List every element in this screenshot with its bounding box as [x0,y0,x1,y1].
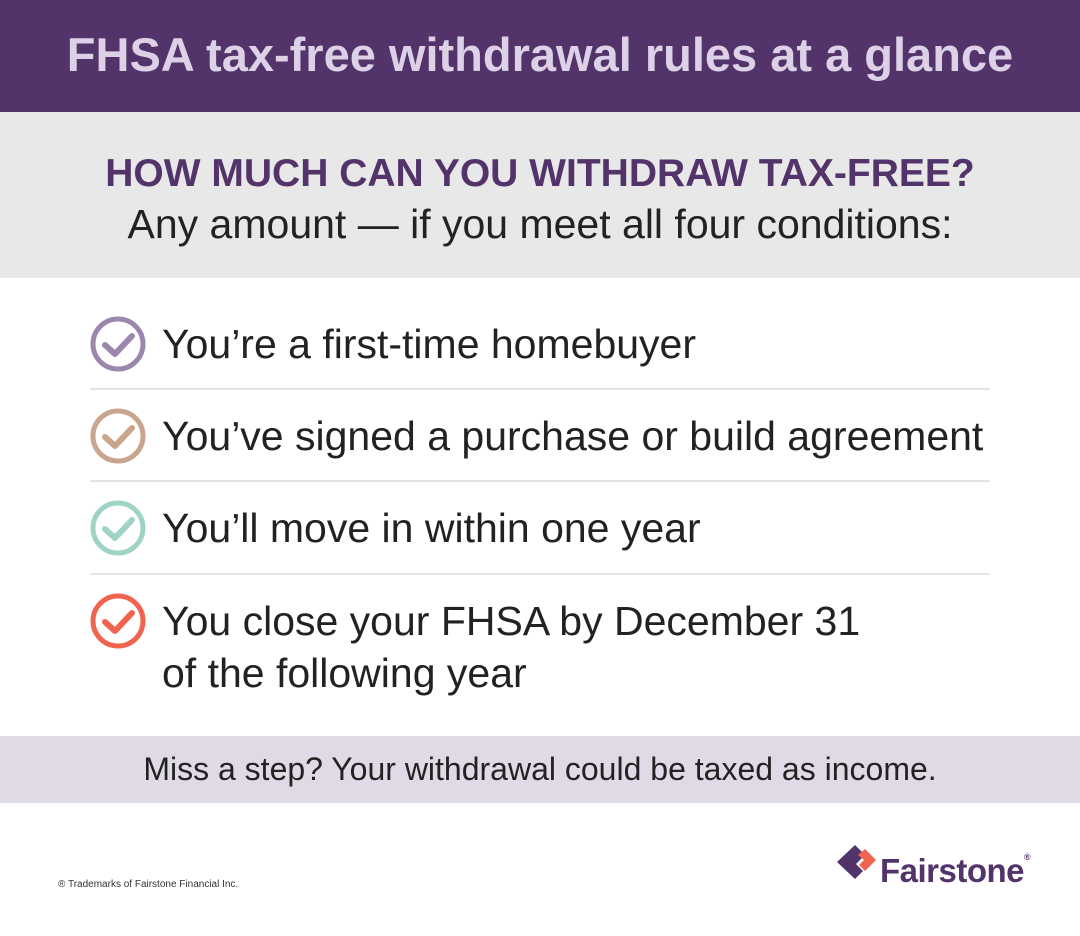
warning band [0,736,1080,803]
condition 4: You close your FHSA by December 31 [162,598,860,644]
condition 4 [90,594,860,696]
logo [837,845,1030,889]
condition 2: You’ve signed a purchase or build agreement [162,413,983,459]
condition 1: You’re a first-time homebuyer [162,321,696,367]
logo: Fairstone® [880,852,1030,889]
icon: check purple [90,316,146,372]
answer text: Any amount — if you meet all four conditions: [128,201,952,247]
title: FHSA tax-free withdrawal rules at a glance [67,28,1013,81]
condition 3: You’ll move in within one year [162,505,701,551]
question band [0,112,1080,278]
footnote: ® Trademarks of Fairstone Financial Inc. [58,879,238,890]
icon: check teal [90,500,146,556]
condition 4: of the following year [162,650,527,696]
question heading: HOW MUCH CAN YOU WITHDRAW TAX-FREE? [105,152,975,195]
header bar [0,0,1080,112]
icon: check tan [90,408,146,464]
icon: check coral [90,594,146,648]
warning band: Miss a step? Your withdrawal could be taxed as income. [143,751,937,787]
